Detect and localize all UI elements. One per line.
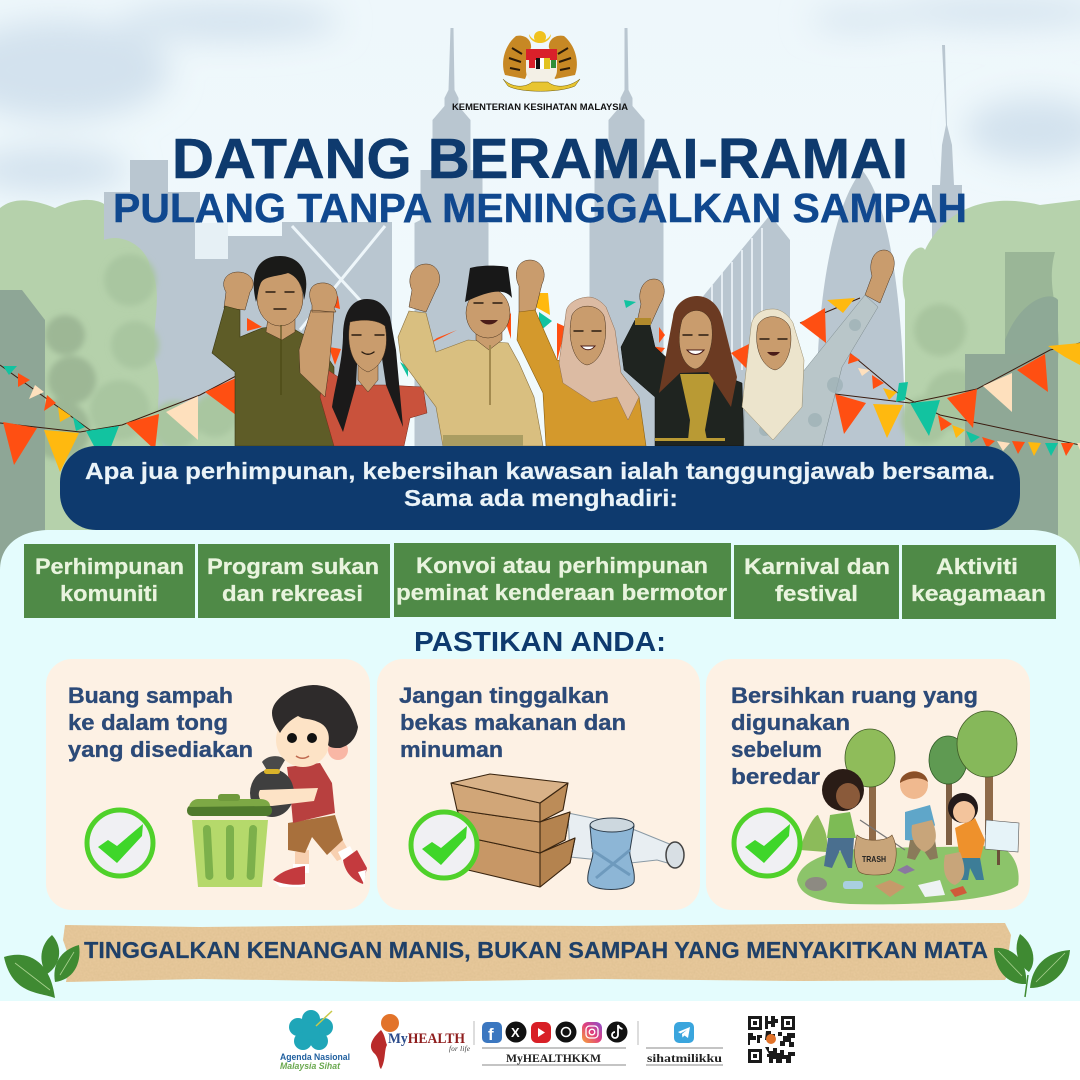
panel: bottom background: [0, 530, 1080, 1001]
tab: Aktiviti keagamaan: keagamaan: [911, 581, 1046, 606]
footer: [0, 1001, 1080, 1080]
tab: Aktiviti keagamaan: [902, 545, 1056, 619]
bunting: behind people: [247, 293, 751, 377]
person: woman in mustard with pink hijab: [516, 260, 646, 446]
card text: Buang sampah: [68, 683, 233, 708]
logo: Agenda Nasional Malaysia Sihat: [280, 1010, 350, 1072]
card text: [731, 683, 978, 789]
card text: sebelum: [731, 737, 822, 762]
handle: MyHEALTHKKM: [482, 1048, 626, 1065]
logo: Jata Negara emblem: [503, 31, 580, 91]
handle: MyHEALTHKKM: MyHEALTHKKM: [506, 1051, 601, 1065]
bunting: left: [0, 365, 236, 472]
person: woman in black with gold trim: [621, 279, 744, 446]
tab: Konvoi: [394, 543, 731, 617]
card text: [399, 683, 626, 762]
ministry name: KEMENTERIAN KESIHATAN MALAYSIA: [452, 102, 628, 113]
icon: children cleaning park: TRASH: [862, 854, 886, 864]
tab: Konvoi: peminat kenderaan bermotor: [396, 580, 727, 605]
intro banner: [60, 446, 1020, 530]
icon: check mark: [411, 812, 477, 878]
icon: food boxes, bottle and can: [451, 774, 684, 890]
person: man in olive baju melayu: [212, 256, 334, 446]
icon: Facebook: [482, 1022, 502, 1044]
logo: MyHEALTH for life: for life: [449, 1045, 470, 1053]
tab: Perhimpunan komuniti: komuniti: [60, 581, 158, 606]
card text: digunakan: [731, 710, 850, 735]
subtitle: PULANG TANPA MENINGGALKAN SAMPAH: [113, 185, 967, 231]
title: DATANG BERAMAI-RAMAI: [172, 127, 908, 191]
illustration: six people raising fists: [212, 250, 894, 446]
tab: Program sukan dan rekreasi: [198, 544, 390, 618]
trees right: [901, 200, 1080, 570]
slogan strip: [63, 923, 1012, 982]
background sky: [0, 0, 1080, 570]
slogan strip: TINGGALKAN KENANGAN MANIS, BUKAN SAMPAH YANG MENYAKITKAN MATA: [84, 937, 988, 963]
building window lines: [195, 223, 762, 370]
person: man in cream baju with songkok: [398, 264, 543, 446]
tab: Perhimpunan komuniti: [24, 544, 195, 618]
card text: [68, 683, 253, 762]
icon: children cleaning park: [797, 711, 1019, 904]
card text: beredar: [731, 764, 820, 789]
logo: Agenda Nasional Malaysia Sihat: Agenda Nasional: [280, 1052, 350, 1063]
tab: Karnival dan festival: Karnival dan: [744, 554, 890, 579]
tab: Konvoi: Konvoi atau perhimpunan: [416, 553, 708, 578]
icon: boy with rubbish bag and bin: [187, 685, 367, 887]
icon: Telegram: [674, 1022, 694, 1043]
trees left: [0, 200, 237, 570]
card text: minuman: [400, 737, 503, 762]
icon: TikTok: [606, 1022, 628, 1042]
logo: MyHEALTH for life: [371, 1014, 470, 1069]
bunting: right: [800, 298, 1080, 456]
panel: bersihkan ruang: [706, 659, 1030, 910]
icon: leaves right: [994, 934, 1070, 997]
icon: Instagram: [582, 1022, 602, 1043]
handle: sihatmilikku: sihatmilikku: [647, 1051, 722, 1065]
tab: Karnival dan festival: [734, 545, 899, 619]
QR code: [748, 1016, 795, 1063]
intro banner: Apa jua perhimpunan, kebersihan kawasan ialah tanggungjawab bersama.: [85, 458, 995, 484]
card text: Jangan tinggalkan: [399, 683, 609, 708]
card text: yang disediakan: [68, 737, 253, 762]
icon: check mark: [734, 810, 800, 876]
card text: ke dalam tong: [68, 710, 228, 735]
panel: jangan tinggalkan: [377, 659, 700, 910]
person: woman in floral with cream hijab: [742, 250, 894, 446]
tab: Aktiviti keagamaan: Aktiviti: [936, 554, 1018, 579]
icon: check mark: [87, 810, 153, 876]
tab: Program sukan dan rekreasi: Program sukan: [207, 554, 379, 579]
icon: Facebook: f: [488, 1025, 494, 1044]
icon: leaves left: [4, 935, 80, 998]
icon: X: [506, 1022, 526, 1042]
tab: Karnival dan festival: festival: [775, 581, 858, 606]
icon: Threads: [556, 1022, 576, 1042]
tab: Perhimpunan komuniti: Perhimpunan: [35, 554, 184, 579]
panel: buang sampah: [46, 659, 370, 910]
city skyline: [104, 28, 962, 446]
icon: X: X: [511, 1025, 520, 1040]
logo: MyHEALTH for life: MyHEALTH: [388, 1031, 465, 1047]
person: woman in red dress: [299, 283, 427, 446]
icon: YouTube: [531, 1022, 551, 1043]
tab: Program sukan dan rekreasi: dan rekreasi: [222, 581, 363, 606]
heading: Pastikan anda: PASTIKAN ANDA:: [414, 626, 666, 657]
handle: sihatmilikku: [646, 1048, 723, 1065]
card text: bekas makanan dan: [400, 710, 626, 735]
intro banner: Sama ada menghadiri:: [404, 485, 678, 511]
logo: Agenda Nasional Malaysia Sihat: Malaysia Sihat: [280, 1061, 341, 1072]
card text: Bersihkan ruang yang: [731, 683, 978, 708]
